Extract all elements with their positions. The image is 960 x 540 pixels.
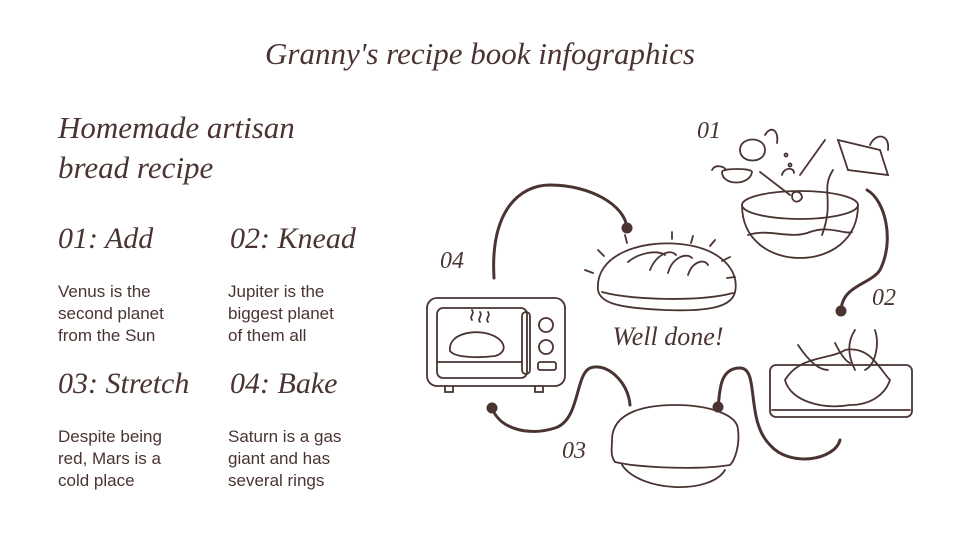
text: 04: giant and has [228,449,330,468]
text: 04: several rings [228,471,324,490]
text: 01: second planet [58,304,164,323]
text: 03 [58,427,162,490]
heading: 01 Add: 01: Add [58,222,153,255]
label: 01: 01 [697,118,721,144]
text: 01 [58,282,164,345]
icon: bread [585,232,736,310]
text: 02 [228,282,334,345]
text: 01: Venus is the [58,282,151,301]
title: Granny's recipe book infographics [265,36,695,71]
text: 03: red, Mars is a [58,449,161,468]
text: 01: from the Sun [58,326,155,345]
subtitle: Homemade artisan [58,110,295,145]
label: 02: 02 [872,285,896,311]
arrow: 03 to 04 [488,367,630,431]
icon: oven [427,298,565,392]
subtitle: bread recipe [58,150,213,185]
text: 04: Saturn is a gas [228,427,341,446]
heading: 03 Stretch: 03: Stretch [58,367,189,400]
label: well done: Well done! [613,322,723,351]
arrow: 04 to bread [494,185,631,278]
text: 04 [228,427,341,490]
icon: mixing bowl [712,130,888,258]
arrow: 01 to 02 [837,190,887,315]
text: 02: biggest planet [228,304,334,323]
label: 03: 03 [562,438,586,464]
heading: 02 Knead: 02: Knead [230,222,356,255]
heading: 04 Bake: 04: Bake [230,367,337,400]
icon: covered bowl [612,405,738,487]
icon: kneading board [770,330,912,417]
text: 03: Despite being [58,427,162,446]
text: 02: of them all [228,326,306,345]
text: 02: Jupiter is the [228,282,324,301]
arrow: 02 to 03 [714,368,840,459]
text: 03: cold place [58,471,135,490]
subtitle [58,110,295,185]
label: 04: 04 [440,248,464,274]
